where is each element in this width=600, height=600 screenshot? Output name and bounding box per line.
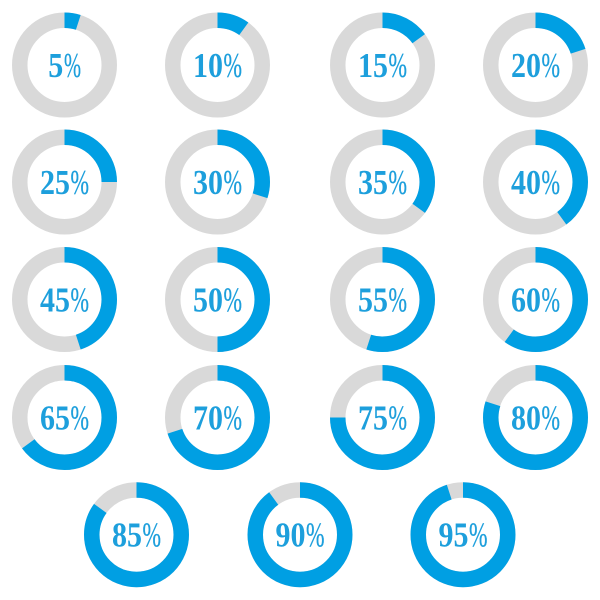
donut: 45%: % xyxy=(70,280,89,320)
donut: 65%: % xyxy=(70,398,89,438)
donut: 40%: % xyxy=(542,163,560,202)
donut: 85% xyxy=(92,490,181,579)
donut: 75% xyxy=(338,373,427,462)
donut: 90%: % xyxy=(306,516,324,555)
donut: 20%: 20 xyxy=(511,46,541,85)
donut: 60% xyxy=(491,255,580,344)
donut: 25%: 25 xyxy=(40,163,70,202)
donut: 55%: 55 xyxy=(358,280,388,320)
donut: 15%: 15 xyxy=(358,46,388,85)
donut: 50% xyxy=(173,255,262,344)
donut: 90% xyxy=(255,490,345,579)
donut: 55%: % xyxy=(388,280,407,320)
donut: 20% xyxy=(491,20,580,110)
donut: 50%: % xyxy=(224,280,242,320)
donut: 75%: 75 xyxy=(358,398,388,438)
donut: 15% xyxy=(338,20,427,110)
donut: 95%: % xyxy=(469,516,488,555)
donut: 85%: % xyxy=(142,516,161,555)
donut: 70% xyxy=(173,373,262,462)
donut: 35% xyxy=(338,137,427,227)
donut: 25%: % xyxy=(70,163,89,202)
donut: 45% xyxy=(20,255,109,344)
donut: 40%: 40 xyxy=(511,163,541,202)
donut: 35%: 35 xyxy=(358,163,388,202)
donut: 90%: 90 xyxy=(276,516,306,555)
donut: 60%: 60 xyxy=(511,280,541,320)
donut: 80% xyxy=(491,373,580,462)
donut: 10%: 10 xyxy=(193,46,223,85)
donut: 60%: % xyxy=(542,280,560,320)
donut: 70%: 70 xyxy=(193,398,223,438)
donut: 35%: % xyxy=(388,163,407,202)
donut: 55% xyxy=(338,255,427,344)
donut: 80%: % xyxy=(542,398,560,438)
donut: 45%: 45 xyxy=(40,280,70,320)
donut: 70%: % xyxy=(224,398,242,438)
donut: 65%: 65 xyxy=(40,398,70,438)
donut: 5%: % xyxy=(64,46,81,85)
donut: 10% xyxy=(173,20,262,110)
donut: 30%: 30 xyxy=(193,163,223,202)
donut: 85%: 85 xyxy=(112,516,142,555)
donut: 25% xyxy=(20,137,109,227)
donut: 10%: % xyxy=(224,46,242,85)
donut: 5%: 5 xyxy=(48,46,63,85)
donut: 80%: 80 xyxy=(511,398,541,438)
donut: 65% xyxy=(20,373,109,462)
donut: 30%: % xyxy=(224,163,242,202)
donut: 50%: 50 xyxy=(193,280,223,320)
donut: 95% xyxy=(418,490,508,579)
donut: 95%: 95 xyxy=(438,516,468,555)
donut: 30% xyxy=(173,137,262,227)
donut: 5% xyxy=(20,20,109,110)
donut: 20%: % xyxy=(542,46,560,85)
donut: 15%: % xyxy=(388,46,407,85)
donut: 40% xyxy=(491,137,580,227)
donut: 75%: % xyxy=(388,398,407,438)
